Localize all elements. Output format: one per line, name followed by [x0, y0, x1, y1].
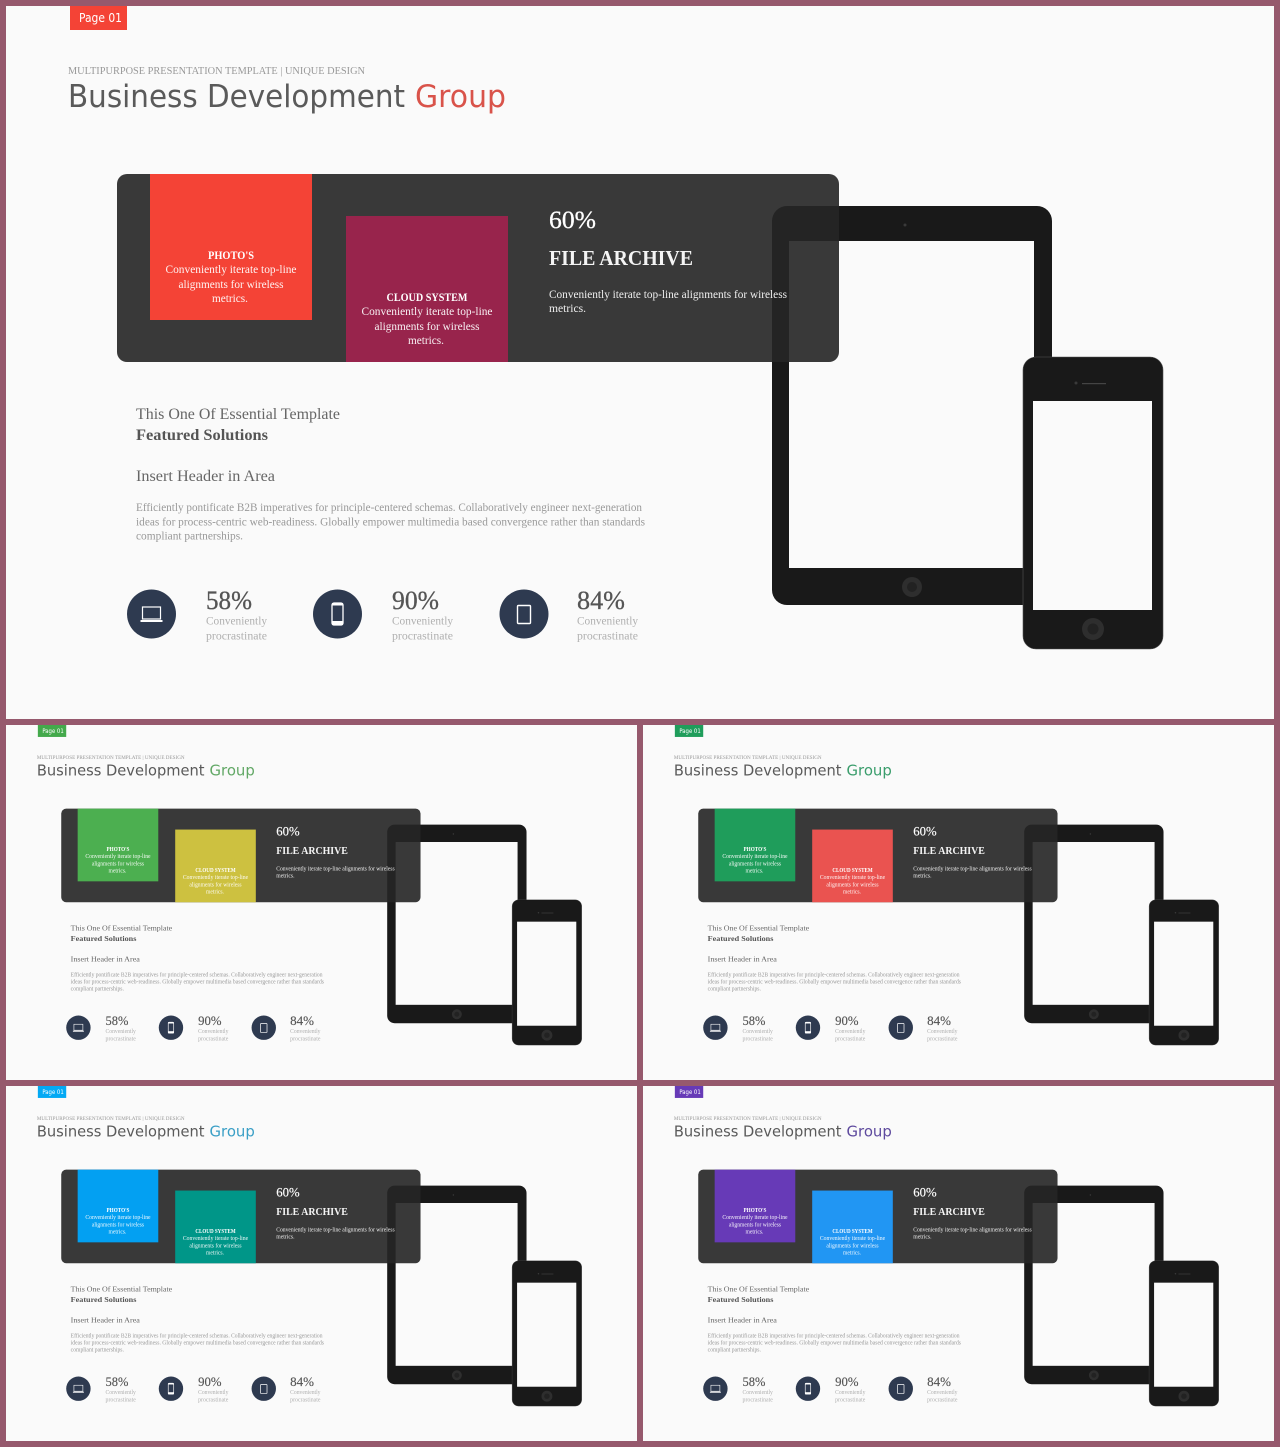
card: photos: Conveniently iterate top-line — [722, 854, 788, 860]
stat: phone 90%: Conveniently — [835, 1390, 866, 1396]
stat: phone 90%: procrastinate — [392, 630, 453, 642]
stat: tablet 84%: Conveniently — [927, 1390, 958, 1396]
stat: phone 90%: Conveniently — [198, 1390, 229, 1396]
title: Group — [415, 79, 506, 115]
card: photos: PHOTO'S — [107, 1208, 129, 1214]
stat: tablet 84%: procrastinate — [290, 1397, 321, 1403]
stat: laptop 58%: Conveniently — [106, 1029, 136, 1035]
stat: laptop 58%: procrastinate — [106, 1036, 136, 1042]
file archive text: metrics. — [913, 1234, 932, 1240]
card: cloud system — [812, 830, 893, 902]
dark feature bar — [61, 809, 421, 902]
card: photos — [150, 174, 312, 320]
stat: tablet 84%: Conveniently — [290, 1029, 321, 1035]
icon: phone device — [1149, 1261, 1219, 1406]
stat: tablet 84% — [500, 586, 638, 642]
card: cloud system: metrics. — [843, 1250, 861, 1256]
heading block: Featured Solutions — [708, 1295, 773, 1304]
heading block: Insert Header in Area — [708, 954, 777, 964]
icon: phone device — [512, 900, 582, 1045]
stat: tablet 84% — [889, 1374, 958, 1403]
page tag: Page 01 — [679, 1089, 701, 1096]
card: photos: Conveniently iterate top-line — [166, 262, 296, 276]
stat: phone 90%: 90% — [198, 1374, 222, 1389]
card: cloud system: CLOUD SYSTEM — [195, 868, 236, 874]
overline text: MULTIPURPOSE PRESENTATION TEMPLATE | UNIQUE DESIGN — [674, 1116, 822, 1122]
title: Business Development — [37, 1122, 205, 1140]
card: photos — [715, 1170, 795, 1242]
file archive text: 60% — [913, 825, 937, 839]
stat: laptop 58% — [127, 586, 267, 642]
stat: tablet 84%: procrastinate — [290, 1036, 321, 1042]
paragraph: Efficiently pontificate B2B imperatives for principle-centered schemas. Collaboratively engineer next-generation — [71, 1332, 323, 1339]
card: photos — [78, 809, 158, 881]
page tag — [38, 725, 66, 737]
card: cloud system: metrics. — [843, 889, 861, 895]
file archive text: 60% — [913, 1186, 937, 1200]
stat: phone 90%: procrastinate — [198, 1397, 229, 1403]
title: Group — [210, 761, 255, 779]
paragraph — [71, 971, 325, 993]
heading block: Insert Header in Area — [136, 468, 275, 485]
heading block: This One Of Essential Template — [136, 406, 340, 423]
title: Business Development — [68, 79, 405, 115]
file archive text: Conveniently iterate top-line alignments for wireless — [549, 289, 788, 301]
stat: laptop 58%: procrastinate — [743, 1036, 773, 1042]
file archive text: FILE ARCHIVE — [913, 1207, 985, 1218]
paragraph: Efficiently pontificate B2B imperatives for principle-centered schemas. Collaboratively engineer next-generation — [71, 971, 323, 978]
page tag — [70, 6, 127, 30]
stat: phone 90%: 90% — [835, 1013, 859, 1028]
stat: laptop 58%: 58% — [106, 1013, 129, 1028]
paragraph: ideas for process-centric web-readiness. Globally empower multimedia based convergence rather than standards — [136, 516, 646, 528]
card: photos: alignments for wireless — [729, 860, 782, 867]
icon: tablet device — [1024, 1186, 1164, 1384]
card: cloud system — [175, 1191, 256, 1263]
card: photos: metrics. — [746, 1229, 764, 1235]
stat: laptop 58%: 58% — [743, 1013, 766, 1028]
page tag — [675, 1086, 703, 1098]
file archive text: metrics. — [276, 1234, 295, 1240]
panel: emerald and coral slide — [643, 725, 1274, 1080]
title: Group — [210, 1122, 255, 1140]
stat: phone 90%: 90% — [835, 1374, 859, 1389]
panel: main red slide — [6, 6, 1274, 719]
paragraph: ideas for process-centric web-readiness. Globally empower multimedia based convergence rather than standards — [708, 1340, 962, 1347]
card: cloud system: alignments for wireless — [189, 881, 242, 888]
stat: phone 90% — [796, 1013, 866, 1042]
page tag: Page 01 — [679, 728, 701, 735]
file archive text: FILE ARCHIVE — [913, 846, 985, 857]
title: Group — [847, 761, 892, 779]
stat: tablet 84%: 84% — [927, 1013, 951, 1028]
card: photos — [78, 1170, 158, 1242]
heading block — [71, 924, 173, 964]
page tag — [675, 725, 703, 737]
stat: phone 90%: 90% — [198, 1013, 222, 1028]
stat: laptop 58%: 58% — [206, 586, 252, 615]
paragraph: compliant partnerships. — [71, 1348, 124, 1354]
card: cloud system — [812, 1191, 893, 1263]
stat: tablet 84%: Conveniently — [290, 1390, 321, 1396]
stat: phone 90% — [159, 1374, 229, 1403]
paragraph — [136, 502, 646, 542]
stat: laptop 58% — [66, 1374, 136, 1403]
stat: tablet 84%: 84% — [290, 1374, 314, 1389]
stat: phone 90%: Conveniently — [835, 1029, 866, 1035]
stat: tablet 84% — [889, 1013, 958, 1042]
panel: purple and blue slide — [643, 1086, 1274, 1441]
card: photos: metrics. — [109, 868, 127, 874]
file archive text — [913, 825, 1032, 879]
heading block: This One Of Essential Template — [708, 1285, 810, 1294]
file archive text — [276, 1186, 395, 1240]
panel: sky blue and teal slide — [6, 1086, 637, 1441]
paragraph: ideas for process-centric web-readiness. Globally empower multimedia based convergence rather than standards — [71, 1340, 325, 1347]
stat: tablet 84%: 84% — [290, 1013, 314, 1028]
stat: laptop 58%: Conveniently — [743, 1029, 773, 1035]
overline text: MULTIPURPOSE PRESENTATION TEMPLATE | UNIQUE DESIGN — [674, 755, 822, 761]
file archive text — [913, 1186, 1032, 1240]
card: cloud system: metrics. — [206, 1250, 224, 1256]
file archive text: Conveniently iterate top-line alignments for wireless — [913, 865, 1032, 872]
overline text: MULTIPURPOSE PRESENTATION TEMPLATE | UNIQUE DESIGN — [37, 755, 185, 761]
heading block: This One Of Essential Template — [71, 1285, 173, 1294]
card: cloud system: CLOUD SYSTEM — [832, 868, 873, 874]
heading block — [71, 1285, 173, 1325]
stat: laptop 58%: Conveniently — [743, 1390, 773, 1396]
heading block: Featured Solutions — [71, 1295, 136, 1304]
dark feature bar — [698, 1170, 1058, 1263]
icon: tablet device — [772, 206, 1052, 605]
title: Business Development — [674, 761, 842, 779]
stat: laptop 58%: 58% — [743, 1374, 766, 1389]
card: cloud system: Conveniently iterate top-line — [820, 875, 885, 881]
card: cloud system: Conveniently iterate top-line — [183, 1236, 248, 1242]
stat: phone 90% — [313, 586, 453, 642]
title: Business Development — [674, 1122, 842, 1140]
stat: laptop 58% — [703, 1013, 773, 1042]
card: cloud system: CLOUD SYSTEM — [386, 292, 468, 304]
stat: phone 90% — [159, 1013, 229, 1042]
paragraph: Efficiently pontificate B2B imperatives for principle-centered schemas. Collaboratively engineer next-generation — [136, 502, 642, 514]
file archive text — [549, 207, 788, 315]
icon: tablet device — [1024, 825, 1164, 1023]
stat: tablet 84% — [252, 1374, 321, 1403]
stat: phone 90%: procrastinate — [198, 1036, 229, 1042]
file archive text: Conveniently iterate top-line alignments for wireless — [913, 1226, 1032, 1233]
stat: laptop 58%: procrastinate — [206, 630, 267, 642]
paragraph: Efficiently pontificate B2B imperatives for principle-centered schemas. Collaboratively engineer next-generation — [708, 971, 960, 978]
card: photos: Conveniently iterate top-line — [722, 1215, 788, 1221]
dark feature bar — [61, 1170, 421, 1263]
heading block: This One Of Essential Template — [71, 924, 173, 933]
stat: laptop 58%: 58% — [106, 1374, 129, 1389]
paragraph: compliant partnerships. — [136, 530, 243, 542]
stat: phone 90%: Conveniently — [198, 1029, 229, 1035]
heading block: Insert Header in Area — [71, 954, 140, 964]
card: cloud system: Conveniently iterate top-line — [183, 875, 248, 881]
stat: laptop 58%: procrastinate — [106, 1397, 136, 1403]
page tag: Page 01 — [79, 11, 122, 25]
paragraph — [71, 1332, 325, 1354]
file archive text: 60% — [276, 1186, 300, 1200]
icon: phone device — [1023, 357, 1163, 649]
stat: laptop 58%: procrastinate — [743, 1397, 773, 1403]
stat: tablet 84%: procrastinate — [927, 1036, 958, 1042]
heading block: Featured Solutions — [708, 934, 773, 943]
icon: tablet device — [387, 1186, 527, 1384]
card: photos: metrics. — [212, 291, 248, 305]
stat: phone 90% — [796, 1374, 866, 1403]
stat: laptop 58%: Conveniently — [206, 616, 267, 628]
stat: tablet 84%: procrastinate — [927, 1397, 958, 1403]
card: cloud system: Conveniently iterate top-line — [362, 304, 492, 318]
heading block: Insert Header in Area — [708, 1315, 777, 1325]
paragraph — [708, 1332, 962, 1354]
paragraph: Efficiently pontificate B2B imperatives for principle-centered schemas. Collaboratively engineer next-generation — [708, 1332, 960, 1339]
card: photos — [715, 809, 795, 881]
page tag: Page 01 — [42, 728, 64, 735]
stat: tablet 84% — [252, 1013, 321, 1042]
paragraph: compliant partnerships. — [708, 987, 761, 993]
stat: phone 90%: procrastinate — [835, 1036, 866, 1042]
card: photos: PHOTO'S — [744, 1208, 766, 1214]
file archive text: metrics. — [549, 303, 586, 315]
heading block — [136, 406, 340, 485]
file archive text: FILE ARCHIVE — [276, 1207, 348, 1218]
heading block: Featured Solutions — [71, 934, 136, 943]
file archive text: metrics. — [913, 873, 932, 879]
card: photos: alignments for wireless — [178, 277, 284, 291]
heading block: This One Of Essential Template — [708, 924, 810, 933]
paragraph — [708, 971, 962, 993]
card: photos: metrics. — [746, 868, 764, 874]
file archive text: 60% — [276, 825, 300, 839]
stat: tablet 84%: 84% — [577, 586, 625, 615]
stat: tablet 84%: procrastinate — [577, 630, 638, 642]
file archive text: Conveniently iterate top-line alignments for wireless — [276, 865, 395, 872]
dark feature bar — [117, 174, 839, 362]
card: cloud system — [346, 216, 508, 362]
page tag — [38, 1086, 66, 1098]
card: photos: Conveniently iterate top-line — [85, 1215, 151, 1221]
stat: tablet 84%: Conveniently — [927, 1029, 958, 1035]
panel: green and yellow slide — [6, 725, 637, 1080]
stat: phone 90%: Conveniently — [392, 616, 453, 628]
paragraph: compliant partnerships. — [708, 1348, 761, 1354]
icon: tablet device — [387, 825, 527, 1023]
stat: phone 90%: procrastinate — [835, 1397, 866, 1403]
overline text: MULTIPURPOSE PRESENTATION TEMPLATE | UNIQUE DESIGN — [68, 65, 365, 77]
icon: phone device — [512, 1261, 582, 1406]
page tag: Page 01 — [42, 1089, 64, 1096]
stat: laptop 58%: Conveniently — [106, 1390, 136, 1396]
card: cloud system: alignments for wireless — [826, 1242, 879, 1249]
card: cloud system: alignments for wireless — [374, 319, 480, 333]
title: Group — [847, 1122, 892, 1140]
heading block — [708, 924, 810, 964]
file archive text: Conveniently iterate top-line alignments for wireless — [276, 1226, 395, 1233]
paragraph: compliant partnerships. — [71, 987, 124, 993]
card: cloud system: Conveniently iterate top-line — [820, 1236, 885, 1242]
file archive text: FILE ARCHIVE — [549, 246, 693, 270]
card: cloud system — [175, 830, 256, 902]
file archive text: metrics. — [276, 873, 295, 879]
file archive text: FILE ARCHIVE — [276, 846, 348, 857]
file archive text — [276, 825, 395, 879]
card: cloud system: alignments for wireless — [826, 881, 879, 888]
overline text: MULTIPURPOSE PRESENTATION TEMPLATE | UNIQUE DESIGN — [37, 1116, 185, 1122]
card: cloud system: alignments for wireless — [189, 1242, 242, 1249]
heading block: Insert Header in Area — [71, 1315, 140, 1325]
card: photos: alignments for wireless — [729, 1221, 782, 1228]
card: cloud system: CLOUD SYSTEM — [195, 1229, 236, 1235]
file archive text: 60% — [549, 207, 596, 234]
card: photos: PHOTO'S — [107, 847, 129, 853]
heading block: Featured Solutions — [136, 427, 268, 444]
card: photos: metrics. — [109, 1229, 127, 1235]
card: photos: PHOTO'S — [744, 847, 766, 853]
stat: phone 90%: 90% — [392, 586, 439, 615]
stat: laptop 58% — [703, 1374, 773, 1403]
card: cloud system: metrics. — [408, 333, 444, 347]
card: photos: PHOTO'S — [208, 250, 254, 262]
paragraph: ideas for process-centric web-readiness. Globally empower multimedia based convergence rather than standards — [708, 979, 962, 986]
card: photos: alignments for wireless — [92, 1221, 145, 1228]
card: photos: alignments for wireless — [92, 860, 145, 867]
heading block — [708, 1285, 810, 1325]
stat: tablet 84%: Conveniently — [577, 616, 638, 628]
dark feature bar — [698, 809, 1058, 902]
card: cloud system: metrics. — [206, 889, 224, 895]
title: Business Development — [37, 761, 205, 779]
stat: tablet 84%: 84% — [927, 1374, 951, 1389]
icon: phone device — [1149, 900, 1219, 1045]
stat: laptop 58% — [66, 1013, 136, 1042]
paragraph: ideas for process-centric web-readiness. Globally empower multimedia based convergence rather than standards — [71, 979, 325, 986]
card: photos: Conveniently iterate top-line — [85, 854, 151, 860]
card: cloud system: CLOUD SYSTEM — [832, 1229, 873, 1235]
